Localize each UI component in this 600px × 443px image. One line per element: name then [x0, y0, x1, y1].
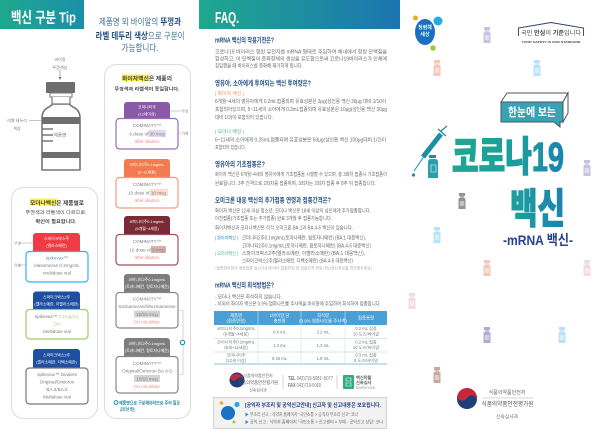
- vial label: Spikevax 0.2: multidose vial: [43, 270, 71, 276]
- contact block: [230, 372, 376, 392]
- dilution table: 10 도즈/바이알: [353, 330, 379, 338]
- vial label: Comirnaty 12+: 6 dose of 30 mcg: [129, 132, 165, 136]
- dilution table: 제품명: [230, 312, 242, 319]
- question: omicron booster: | 화이자백신 |: [215, 234, 238, 242]
- question: primary series: 화이자 백신은 6개월~4세의 영유아에게 기초접종을 시행할 수 있으며, 총 3회차 접종시 기초접종이: [215, 171, 387, 178]
- vial label: Comirnaty 6m-4y: 코미나티주0.1mg/mL: [129, 219, 165, 224]
- vial diagram: [7, 56, 80, 170]
- panel: Pfizer vaccines: [104, 64, 190, 418]
- vial label: Comirnaty bivalent BA.4-5: Original/Omicron BA.4-5: [122, 368, 172, 374]
- question: omicron booster: 스파이크박스2주(엘라소메란, 다벡소메란) (BA.4-5 대응백신): [242, 258, 353, 264]
- question: omicron booster: 이전접종(기초접종 또는 추가접종) 완료 3개월 후 접종가능합니다.: [215, 215, 332, 222]
- vial label: Comirnaty 6m-4y: (6개월~4세용): [135, 226, 159, 231]
- vial label: Spikevax 0.1: 스파이크박스2주: [43, 294, 71, 300]
- question: dilution: [215, 280, 381, 308]
- vial label: Comirnaty bivalent BA.1: 코미나티2주0.1mg/mL: [128, 277, 167, 282]
- contact block: FAX 043)719-5060: [288, 383, 321, 389]
- dilution table: 희석량: [317, 312, 329, 319]
- vial label: Comirnaty 5-11: [116, 159, 178, 208]
- vial label: Spikevax bivalent: Original/Omicron: [40, 380, 75, 384]
- vial label: Comirnaty 6m-4y: 10 dose of 3 mcg: [129, 248, 165, 252]
- question: omicron booster: 오미크론 대응 백신의 추가접종 연령과 접종간격은?: [215, 196, 331, 204]
- vial label: Spikevax bivalent: [26, 349, 88, 404]
- dilution table: [214, 311, 387, 364]
- question: omicron booster: | 모더나백신 |: [215, 250, 238, 257]
- vial label: Comirnaty 12+: 코미나티주: [138, 104, 156, 110]
- heading band: FAQ: [199, 0, 400, 29]
- panel: vaccine distinction tip: [0, 0, 190, 418]
- intro text: 라벨 테두리 색상으로 구분이: [96, 30, 184, 41]
- logo: ministry: 신속심사과: [496, 413, 519, 420]
- contact block: 식품의약품안전평가원: [238, 379, 278, 386]
- logo: safety slogan: 국민 안심이 기준입니다: [521, 29, 581, 37]
- dilution table: 6 도즈/바이알: [354, 357, 378, 364]
- dilution table: 1바이알 당: [270, 312, 289, 319]
- question: omicron booster: 화이자백신과 모더나백신은 각각 오미크론 BA.1과 BA.4-5 백신이 있습니다.: [215, 224, 353, 232]
- question: dilution: mRNA 백신의 희석방법은?: [215, 280, 274, 290]
- whistleblower callout: 공익 신고 : 식약처 홈페이지 "국민소통 > 신고센터 > 부패 · 공익신고 상담" 코너: [250, 418, 383, 426]
- whistleblower callout: 부조리 신고 : 식약처 홈페이지 "국민소통 > 공직자 부조리 신고" 코너: [250, 411, 358, 418]
- question: pediatric dose: | 화이자 백신 |: [215, 90, 244, 97]
- panel: FAQ: [199, 0, 400, 428]
- vial label: Comirnaty 6m-4y: [116, 216, 178, 265]
- question: dilution: - 이외의 화이자 백신은 0.9% 염화나트륨 주사액을 바이알에 주입하여 희석하여 접종합니다.: [215, 300, 381, 308]
- vial label: Comirnaty 12+: after dilution: [134, 139, 160, 144]
- bracket marker: [178, 310, 185, 374]
- Moderna heading: [26, 198, 86, 225]
- vial label: Spikevax 0.2: 뚜껑: [14, 240, 21, 246]
- question: omicron booster: 코미나티2주0.1mg/mL(토자나메란, 팜토자나메란) (BA.4-5 대응백신): [242, 242, 371, 250]
- question: primary series: 영유아의 기초접종은?: [215, 160, 265, 168]
- question: omicron booster: [215, 196, 373, 270]
- vial diagram: 제품명: [54, 132, 66, 138]
- vial diagram: 바이알: [54, 56, 66, 62]
- question: omicron booster: 화이자 백신은 12세 이상 청소년, 모더나 백신은 18세 이상의 성인에게 추가접종합니다.: [215, 208, 371, 214]
- dilution table: 1.3 mL: [273, 343, 287, 348]
- logo: public integrity mark: [413, 16, 442, 51]
- dilution table: 2.2 mL: [317, 330, 330, 334]
- dilution table: 0.4 mL: [273, 330, 287, 334]
- vial label: Spikevax 0.1: spikevax™ 0.1mg/mL: [35, 314, 80, 319]
- question: pediatric dose: 포함되어있으며, 5~11세의 소아에게 0.2mL접종되며 유효성분은 10μg(성인용 백신 30μg: [215, 106, 387, 113]
- dilution table: 1.8 mL: [317, 356, 330, 361]
- caution note: (오미크론 백신): [120, 406, 135, 413]
- dilution table: 코미나티주0.1mg/mL: [217, 338, 256, 346]
- dilution table: 0.2 mL 접종: [355, 325, 377, 331]
- question: mechanism: [215, 36, 387, 70]
- panel: Moderna vaccines: [12, 188, 98, 418]
- vial label: Comirnaty 5-11: 코미나티주0.1mg/mL: [129, 162, 165, 167]
- question: mechanism: mRNA 백신의 작용기전은?: [215, 36, 274, 44]
- title: [452, 134, 565, 232]
- vial label: Spikevax bivalent: BA.4/BA.5: [46, 387, 68, 392]
- question: primary series: 완료됩니다. 3주 간격으로 2회차를 접종하며, 3회차는 2회차 접종 후 8주 뒤 접종합니다.: [215, 180, 376, 187]
- panel: cover: [408, 16, 590, 420]
- dilution table: 1.3 mL: [317, 343, 330, 348]
- vial label: Comirnaty bivalent BA.1: [116, 274, 178, 328]
- vial label: Comirnaty bivalent BA.4-5: Do not dilute: [134, 384, 160, 389]
- whistleblower callout: [공익자 부조리 및 공익신고안내] 신고자 및 신고내용은 보호됩니다.: [245, 401, 381, 409]
- heading band: FAQ: FAQ.: [215, 10, 239, 27]
- question: pediatric dose: | 모더나 백신 |: [215, 128, 244, 135]
- dilution table: (접종연령): [226, 318, 246, 324]
- heading band: vaccine tip: 백신 구분 Tip: [11, 10, 76, 26]
- vial label: Comirnaty 6m-4y: COMINATY™: [133, 239, 161, 244]
- question: pediatric dose: [215, 78, 387, 151]
- caution note: [114, 400, 180, 413]
- dilution table: 코미나티주0.1mg/mL: [217, 325, 256, 332]
- dilution table: (12세 이상): [226, 357, 247, 364]
- vial label: Spikevax bivalent: 스파이크박스2주: [43, 352, 71, 358]
- question: pediatric dose: 6개월~4세의 영유아에게 0.2mL접종되며 유효성분은 3μg(성인용 백신 30μg 대비 1/10이: [215, 98, 386, 105]
- subtitle: -mRNA 백신-: [503, 232, 573, 248]
- vial label: Comirnaty 6m-4y: after dilution: [134, 255, 160, 260]
- vial label: Spikevax 0.2: (엘라소메란): [46, 243, 67, 248]
- vial label: Comirnaty 12+: 라벨: [182, 130, 189, 136]
- vial label: Comirnaty bivalent BA.4-5: 코미나티2주0.1mg/mL: [128, 341, 167, 346]
- vial label: Spikevax 0.2: 라벨: [14, 262, 21, 268]
- vial label: Comirnaty bivalent BA.1: Do not dilute: [134, 320, 160, 324]
- label box: at a glance: [501, 93, 568, 127]
- logo: public integrity mark: 세상: [420, 31, 430, 38]
- contact block: 백신의를: [356, 374, 372, 381]
- dilution table: 0.2 mL 접종: [355, 338, 377, 344]
- vial label: Comirnaty 5-11: (5~11세용): [138, 170, 157, 174]
- vial label: Comirnaty bivalent BA.1: tozinameran/riltozinameran: [118, 304, 176, 309]
- vial label: Comirnaty bivalent BA.1: (토자나메란, 림토자나메란): [125, 284, 170, 289]
- vial diagram: 뚜껑색상: [53, 64, 68, 70]
- vial label: Spikevax 0.2: elasomeran 0.2mg/mL: [34, 263, 80, 268]
- vial label: Spikevax bivalent: (엘라소메란, 다벡소메란): [36, 360, 77, 364]
- question: mechanism: 합성하고, 이 단백질이 중화항체의 생성을 유도함으로써 코로나19바이러스가 인체에: [215, 56, 387, 62]
- question: pediatric dose: 6~11세의 소아에게 0.25mL접종되며 유효성분은 50μg(성인용 백신 100μg대비 1/2)이: [215, 136, 386, 144]
- logo: ministry: [457, 388, 534, 420]
- Moderna heading: 모더나백신은 제품별로: [30, 199, 84, 207]
- intro text: 가능합니다.: [122, 43, 158, 53]
- Moderna heading: 뚜껑색과 라벨색이 다르므로,: [26, 209, 86, 216]
- vial label: Comirnaty 12+: COMINATY™: [133, 123, 161, 128]
- vial label: Comirnaty 5-11: COMINATY™: [133, 182, 161, 187]
- contact block: 식품의약품안전처: [243, 372, 273, 378]
- question: omicron booster: 코미나티2주0.1mg/mL(토자나메란, 림토자나메란) (BA.1 대응백신),: [242, 234, 366, 242]
- Moderna heading: 확인이 필요합니다.: [36, 218, 76, 225]
- vial label: Spikevax 0.1: (엘라소메란, 이멜라소메란): [34, 302, 79, 306]
- logo: safety slogan: YOUR SAFETY IS OUR STANDARD: [522, 40, 581, 44]
- question: pediatric dose: 영유아, 소아에게 투여되는 백신 투여량은?: [215, 78, 311, 88]
- dilution table: 코미나티주: [226, 352, 246, 358]
- dilution table: 0.3 mL 접종: [355, 352, 377, 358]
- title: 백신: [510, 186, 565, 232]
- question: pediatric dose: 대비 1/3)이 포함되어 있습니다.: [215, 114, 273, 121]
- vial label: Spikevax 0.1: [26, 292, 88, 339]
- question: omicron booster: 스파이크박스2주(엘라소메란, 이멜라소메란) (BA.1 대응백신),: [242, 250, 365, 257]
- vial label: Spikevax 0.2: 스파이크박스주: [44, 236, 69, 241]
- vial diagram: 라벨 테두리: [7, 117, 27, 123]
- vial label: Comirnaty bivalent BA.1: COMINATY™: [133, 296, 161, 302]
- caution note: 제품명으로 구분해야하므로 주의 필요: [119, 400, 180, 406]
- decorative vial icons: [408, 27, 590, 383]
- question: primary series: [215, 160, 387, 187]
- vial label: Comirnaty 12+: (12세이상): [138, 112, 157, 116]
- vial label: Spikevax bivalent: Multidose vial: [43, 394, 71, 400]
- vial diagram: 색상: [13, 125, 21, 131]
- vial label: Comirnaty bivalent BA.4-5: 15/15 mcg: [136, 376, 158, 382]
- question: pediatric dose: 포함되어 있습니다.: [215, 144, 246, 151]
- vial label: Comirnaty 12+: [116, 102, 189, 149]
- logo: ministry: 식품의약품안전처: [489, 389, 525, 396]
- vial label: Comirnaty 12+: 뚜껑: [182, 108, 188, 114]
- vial label: Spikevax 0.2: spikevax™: [46, 256, 68, 260]
- dilution table: (0.9% 염화나트륨 주사액): [299, 318, 347, 324]
- contact block: Bioservice: [356, 385, 376, 390]
- question: omicron booster: *질병관리청의 예방접종 실시기준에 따라 접종연령 및 접종간격 변동가능(최신정보를 확인해주세요): [215, 266, 373, 270]
- whistleblower callout: [214, 398, 386, 428]
- Pfizer heading: 뚜껑색과 라벨색이 동일합니다.: [114, 86, 180, 92]
- dilution table: 충전량: [273, 318, 286, 324]
- contact block: TEL 043)719-5081~5077: [288, 376, 333, 382]
- vial label: Comirnaty bivalent BA.4-5: COMINATY™: [133, 361, 161, 366]
- question: mechanism: 코로나19 바이러스 항원 유전자를 mRNA 형태로 주입하여 체내에서 항원 단백질을: [215, 48, 387, 56]
- logo: ministry: 식품의약품안전평가원: [482, 400, 534, 408]
- vial label: Comirnaty 5-11: after dilution: [134, 198, 160, 203]
- intro text: [96, 16, 184, 53]
- dilution table: 10 도즈/바이알: [353, 344, 379, 351]
- icon: syringe and vial: [412, 126, 447, 178]
- heading band: vaccine tip: [0, 0, 84, 29]
- vial label: Spikevax 0.1: Multidose vial: [43, 329, 71, 334]
- vial label: Spikevax 0.1: O/o: [53, 322, 61, 326]
- vial label: Spikevax bivalent: spikevax™ bivalent: [37, 372, 78, 377]
- question: mechanism: 침입했을 때 바이러스를 중화해 제거하게 됩니다.: [215, 62, 303, 70]
- intro text: 제품명 외 바이알의 뚜껑과: [99, 16, 182, 27]
- dilution table: (5세~11세용): [224, 344, 248, 351]
- Pfizer heading: [114, 74, 180, 92]
- contact block: 신속심사과: [249, 388, 267, 392]
- dilution table: 0.45 mL: [272, 356, 288, 361]
- dilution table: (6개월~4세용): [223, 330, 249, 338]
- logo: safety slogan: [518, 22, 584, 44]
- label box: at a glance: 한눈에 보는: [508, 105, 556, 119]
- vial label: Comirnaty 5-11: 10 dose of 10 mcg: [128, 190, 166, 196]
- vial label: Comirnaty bivalent BA.4-5: [116, 338, 178, 393]
- vial label: Comirnaty bivalent BA.4-5: (토자나메란, 팜토자나메란): [125, 348, 170, 353]
- dilution table: 접종용량: [358, 314, 374, 320]
- logo: public integrity mark: 청렴해: [418, 24, 432, 31]
- vial label: Comirnaty bivalent BA.1: 15/15 mcg: [136, 312, 158, 317]
- vial label: Spikevax 0.2: [14, 233, 88, 282]
- contact block: 신속심사: [356, 379, 372, 386]
- question: dilution: - 모더나 백신은 희석하지 않습니다.: [215, 294, 282, 300]
- Pfizer heading: 화이자백신은 제품의: [122, 74, 172, 82]
